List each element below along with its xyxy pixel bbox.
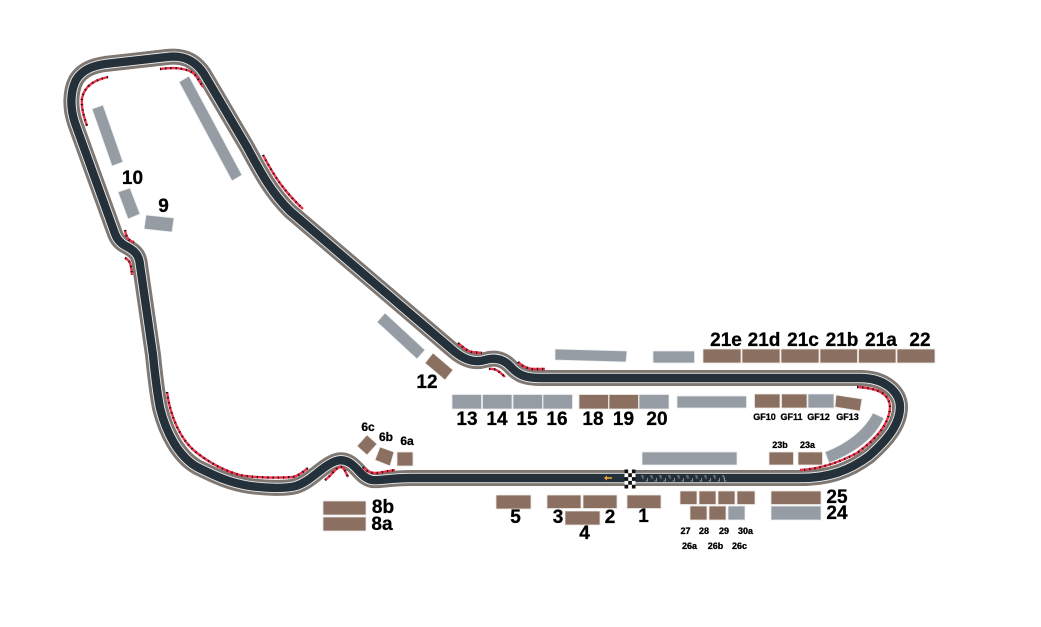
chequered start/finish line	[624, 470, 636, 488]
grandstand 5: 5	[510, 507, 521, 528]
grandstand GF10	[753, 394, 780, 422]
grey bar: back straight left	[92, 105, 123, 166]
grey bar: upper right	[653, 351, 694, 363]
grandstand 8a: 8a	[371, 514, 393, 535]
grandstand 23a	[798, 440, 822, 465]
grandstand 4: 4	[579, 523, 590, 544]
grandstand 25	[771, 487, 848, 508]
grandstand 18: 18	[582, 409, 604, 430]
grandstand 21d	[742, 330, 780, 363]
grey bar: upper left	[555, 349, 627, 362]
grandstand 20: 20	[646, 409, 668, 430]
grandstand 3	[547, 495, 581, 528]
grandstand 8a	[323, 514, 393, 535]
grandstand 8b: 8b	[372, 497, 394, 518]
grandstand 14	[482, 394, 512, 430]
grandstand 9	[144, 196, 174, 232]
grandstand 9: 9	[158, 196, 169, 217]
grandstand 26b	[708, 506, 726, 551]
grandstand 10: 10	[122, 168, 143, 189]
grandstand GF11	[780, 394, 807, 422]
grandstand 29: 29	[719, 526, 729, 536]
race track	[71, 57, 900, 488]
grandstand 19: 19	[613, 409, 634, 430]
grandstand 4	[565, 511, 600, 544]
curved grey stand	[825, 413, 884, 463]
grandstand 21a	[858, 330, 897, 363]
grandstand 20	[639, 394, 669, 430]
grey bar: above start line	[642, 452, 737, 465]
grandstand 27	[680, 491, 697, 536]
grandstand 16	[543, 394, 572, 430]
grandstand 18	[579, 394, 608, 430]
grandstand 6c: 6c	[361, 420, 375, 434]
grandstand 6b: 6b	[379, 430, 393, 444]
grandstand 24	[771, 503, 848, 524]
grandstand 8b	[323, 497, 394, 518]
grandstand 12: 12	[416, 372, 438, 393]
grandstand 5	[496, 495, 531, 528]
grandstand 23a: 23a	[800, 440, 816, 450]
grandstand 30a	[737, 491, 755, 536]
grandstand 23b: 23b	[772, 440, 788, 450]
grandstand 23b	[769, 440, 794, 465]
grandstand GF10: GF10	[753, 412, 776, 422]
grandstand 12	[416, 353, 453, 393]
starting grid markings	[641, 476, 726, 481]
grandstand 21a: 21a	[865, 330, 897, 351]
grandstand 2	[583, 495, 617, 528]
grandstand 15: 15	[516, 409, 538, 430]
grandstand 6a: 6a	[400, 434, 414, 448]
grandstand 26c	[728, 506, 747, 551]
grey bar: curva grande	[179, 76, 242, 181]
direction arrow	[604, 476, 612, 480]
grandstand 3: 3	[553, 507, 563, 528]
grandstand 27: 27	[680, 526, 691, 536]
grandstand 21e: 21e	[710, 330, 742, 351]
grandstand 10	[118, 168, 143, 219]
grandstand 22: 22	[909, 330, 931, 351]
grandstand 21c	[781, 330, 819, 363]
grandstand 25: 25	[826, 487, 848, 508]
grandstand 21c: 21c	[787, 330, 819, 351]
grandstand 26b: 26b	[708, 541, 724, 551]
grandstand GF12	[807, 394, 834, 422]
grandstand 26a: 26a	[682, 541, 698, 551]
grandstand 13: 13	[456, 409, 478, 430]
grandstand 21b: 21b	[826, 330, 858, 351]
grandstand 16: 16	[546, 409, 568, 430]
grandstand 30a: 30a	[738, 526, 754, 536]
grandstand 2: 2	[605, 507, 615, 528]
grandstand 29	[718, 491, 735, 536]
grey bar: beside 20	[677, 396, 746, 408]
grandstand GF13	[835, 395, 862, 422]
grandstand 6b	[375, 430, 394, 466]
grandstand 19	[609, 394, 638, 430]
grandstand 28	[699, 491, 716, 536]
grandstand 1	[627, 495, 661, 527]
grandstand 6a	[397, 434, 414, 466]
grandstand 1: 1	[638, 506, 649, 527]
grandstand 22	[897, 330, 935, 363]
grandstand GF13: GF13	[836, 412, 859, 422]
grandstand 21e	[703, 330, 742, 363]
grey bar: near 12	[377, 313, 425, 359]
grandstand 26c: 26c	[732, 541, 747, 551]
grandstand 15	[513, 394, 542, 430]
grandstand 6c	[357, 420, 377, 455]
grandstand 26a	[682, 506, 707, 551]
kerbs	[82, 68, 890, 480]
grandstand GF11: GF11	[780, 412, 803, 422]
grandstand 24: 24	[826, 503, 848, 524]
grandstand 13	[452, 394, 482, 430]
grandstand 21b	[820, 330, 858, 363]
grandstand GF12: GF12	[807, 412, 830, 422]
grandstand 14: 14	[486, 409, 508, 430]
grandstand 21d: 21d	[748, 330, 780, 351]
grandstand 28: 28	[699, 526, 709, 536]
